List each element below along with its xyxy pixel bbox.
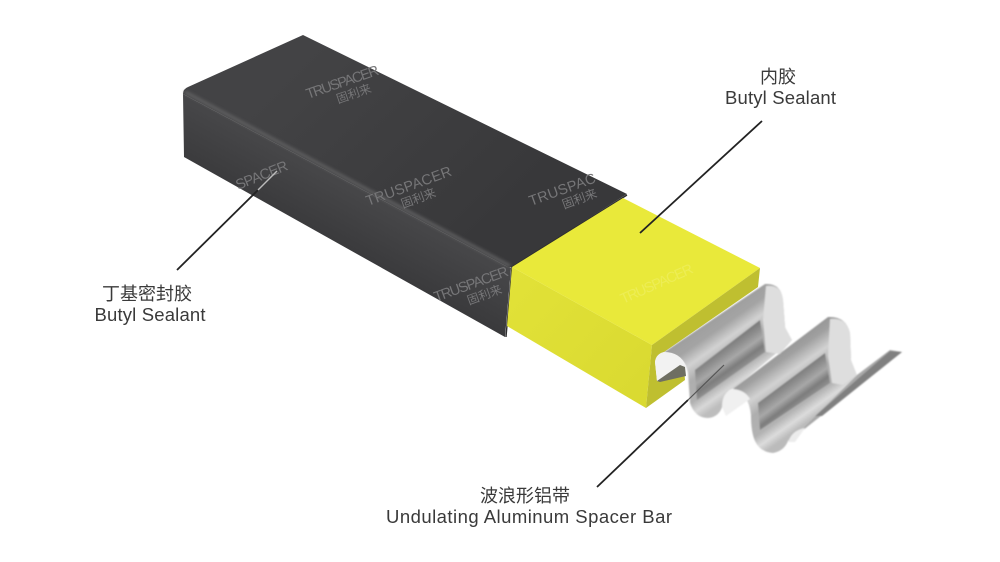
watermark 2: TRUSPACER	[364, 164, 454, 210]
leader line: outer sealant end	[258, 171, 277, 190]
first lobe	[663, 284, 792, 418]
leader line: spacer bar	[597, 400, 688, 487]
label: inner butyl sealant	[725, 67, 836, 108]
dark outer butyl sealant	[183, 35, 627, 337]
top face	[183, 35, 627, 267]
watermark 2: 固利来	[399, 186, 438, 211]
label: outer butyl sealant	[94, 284, 206, 325]
metal spacer bar	[663, 284, 902, 453]
first groove	[695, 320, 765, 400]
inner valley highlight	[722, 389, 750, 416]
label: spacer bar: Undulating Aluminum Spacer Bar	[386, 506, 672, 527]
label: outer butyl sealant: Butyl Sealant	[94, 304, 206, 325]
label: inner butyl sealant: 内胶	[760, 67, 796, 87]
leader line: outer sealant	[177, 190, 258, 270]
label: inner butyl sealant: Butyl Sealant	[725, 87, 836, 108]
highlighted front edge	[185, 92, 510, 266]
watermark 1: 固利来	[335, 81, 373, 106]
spacer cavity	[655, 352, 686, 381]
tail valley highlight	[788, 428, 805, 442]
watermark 5: 固利来	[465, 282, 504, 308]
label: outer butyl sealant: 丁基密封胶	[102, 284, 192, 304]
watermarks	[234, 63, 603, 318]
watermark 4: SPACER	[234, 158, 290, 194]
leader line: inner sealant	[640, 121, 762, 233]
first bend highlight	[763, 286, 792, 354]
leader line: spacer bar end	[688, 365, 724, 400]
end lip	[506, 195, 627, 337]
cavity shadow	[657, 365, 686, 382]
watermark 3: 固利来	[560, 186, 599, 212]
label: spacer bar	[386, 486, 672, 527]
yellow watermark: TRUSPACER	[618, 261, 696, 308]
yellow top face	[512, 198, 760, 345]
watermark 3: TRUSPAC	[527, 171, 598, 210]
tail dark strip	[815, 351, 902, 416]
watermark 5: TRUSPACER	[432, 264, 511, 306]
yellow end face	[646, 268, 760, 408]
second groove	[758, 353, 830, 430]
yellow inner sealant	[507, 198, 760, 408]
watermark 1: TRUSPACER	[304, 63, 381, 103]
second lobe	[733, 317, 857, 453]
label: spacer bar: 波浪形铝带	[480, 486, 570, 506]
second bend highlight	[828, 319, 857, 385]
flat metal tail	[788, 350, 902, 441]
side face	[183, 94, 511, 337]
yellow side face	[507, 267, 652, 408]
